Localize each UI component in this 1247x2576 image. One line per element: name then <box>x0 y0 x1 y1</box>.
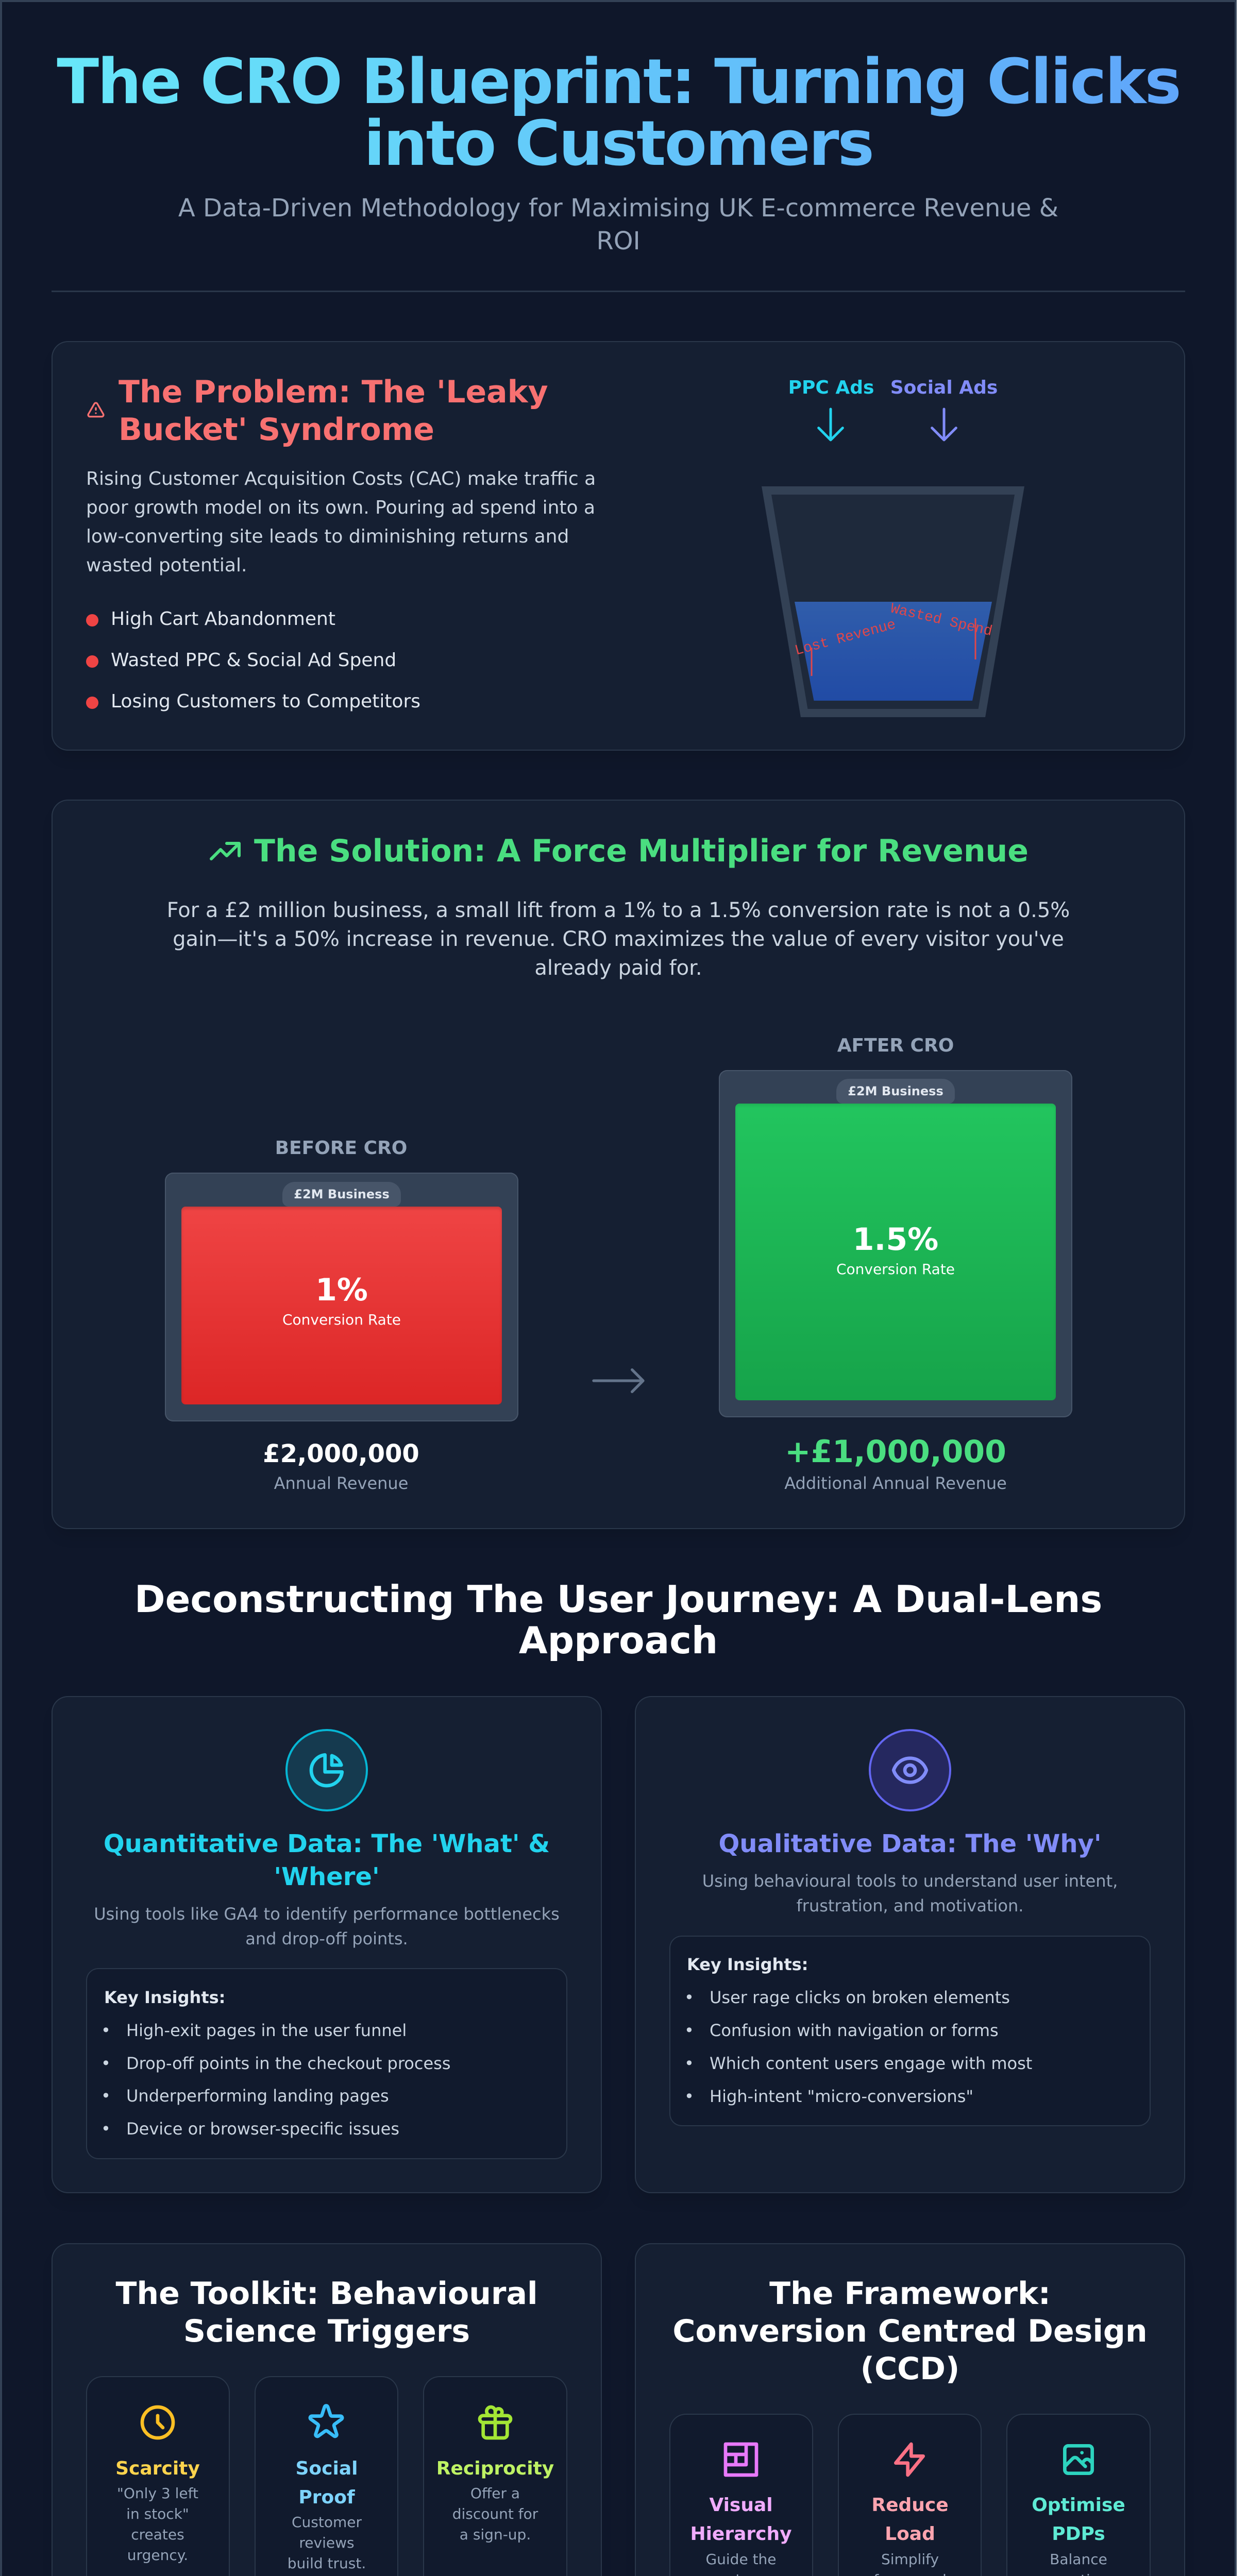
box: key insights qualitative: High-intent "micro-conversions" <box>710 2087 973 2106</box>
panel: the toolkit <box>52 2243 602 2576</box>
icon: lightning bolt <box>889 2439 930 2480</box>
box: key insights qualitative: • <box>684 2021 694 2040</box>
heading: scarcity: Scarcity <box>115 2458 200 2479</box>
heading: social proof: Proof <box>298 2487 355 2508</box>
card: reduce load <box>838 2414 982 2576</box>
arrow: social into bucket <box>931 408 957 441</box>
box: key insights qualitative: Which content users engage with most <box>710 2054 1032 2073</box>
heading: user journey: Deconstructing The User Journey: A Dual-Lens <box>134 1578 1102 1621</box>
solution description: gain—it's a 50% increase in revenue. CRO maximizes the value of every visitor you've <box>173 927 1064 951</box>
caption: annual revenue: Annual Revenue <box>274 1473 408 1493</box>
description: quantitative <box>94 1904 560 1948</box>
box: key insights qualitative <box>669 1936 1151 2126</box>
box: key insights: Drop-off points in the checkout process <box>126 2054 450 2073</box>
icon: clock <box>140 2405 175 2440</box>
box: key insights qualitative: User rage clicks on broken elements <box>710 1988 1010 2007</box>
text: visual hierarchy <box>701 2549 781 2576</box>
box: key insights qualitative: • <box>684 2054 694 2073</box>
solution description <box>167 899 1070 980</box>
heading: the problem: Bucket' Syndrome <box>119 412 434 448</box>
heading: social proof <box>296 2458 358 2508</box>
heading: social proof: Social <box>296 2458 358 2479</box>
chart: leaky bucket: Wasted Spend <box>889 601 993 640</box>
text: scarcity <box>117 2485 198 2564</box>
list: problem symptoms: Wasted PPC & Social Ad Spend <box>111 650 396 671</box>
title <box>52 52 1185 175</box>
problem description: wasted potential. <box>86 555 247 576</box>
heading: framework: The Framework: <box>769 2276 1051 2312</box>
box: key insights: High-exit pages in the user funnel <box>126 2021 407 2040</box>
heading: key insights qualitative: Key Insights: <box>687 1955 808 1974</box>
icon: photograph <box>1058 2439 1099 2480</box>
description: quantitative: Using tools like GA4 to identify performance bottlenecks <box>94 1904 560 1924</box>
box: key insights: • <box>101 2054 111 2073</box>
box: key insights qualitative: Confusion with navigation or forms <box>710 2021 999 2040</box>
icon: layout <box>720 2439 762 2480</box>
icon: warning triangle <box>87 402 105 417</box>
heading: the problem <box>119 374 548 448</box>
subtitle <box>178 194 1058 256</box>
heading: reduce load: Reduce <box>871 2495 949 2516</box>
label: PPC ads: PPC Ads <box>788 377 874 398</box>
icon: star <box>308 2404 344 2438</box>
card: visual hierarchy <box>669 2414 813 2576</box>
caption: additional annual revenue: Additional Annual Revenue <box>784 1473 1007 1493</box>
text: scarcity: creates <box>131 2526 184 2543</box>
card: optimise PDPs <box>1006 2414 1151 2576</box>
text: scarcity: in stock" <box>126 2505 189 2522</box>
description: quantitative: and drop-off points. <box>245 1929 408 1948</box>
heading: qualitative: Qualitative Data: The 'Why' <box>718 1829 1102 1858</box>
value: annual revenue before: £2,000,000 <box>263 1439 419 1468</box>
icon: pie chart <box>285 1729 368 1811</box>
text: social proof: build trust. <box>288 2555 366 2572</box>
heading: key insights: Key Insights: <box>104 1988 225 2007</box>
box: key insights qualitative: • <box>684 1988 694 2007</box>
panel: quantitative data <box>52 1696 602 2193</box>
text: reciprocity <box>452 2485 538 2543</box>
icon: gift <box>478 2405 512 2440</box>
text: social proof: Customer <box>292 2514 362 2531</box>
list: problem symptoms: High Cart Abandonment <box>111 608 335 630</box>
text: optimise PDPs: Balance <box>1050 2551 1107 2568</box>
text: optimise PDPs <box>1035 2549 1122 2576</box>
solution description: already paid for. <box>534 956 702 980</box>
heading: framework: (CCD) <box>861 2351 959 2387</box>
heading: visual hierarchy <box>690 2491 792 2549</box>
heading: user journey: Approach <box>519 1619 718 1662</box>
subtitle: ROI <box>596 227 641 256</box>
box: key insights: Underperforming landing pages <box>126 2086 389 2106</box>
chart: leaky bucket <box>762 486 1024 717</box>
chart: leaky bucket: Lost Revenue <box>793 617 898 659</box>
heading: reciprocity: Reciprocity <box>436 2458 554 2479</box>
heading: the solution: The Solution: A Force Multiplier for Revenue <box>254 833 1029 869</box>
badge: business size before: £2M Business <box>294 1187 390 1201</box>
card: scarcity <box>86 2376 230 2576</box>
bar: 1% conversion rate <box>181 1207 502 1404</box>
badge: business size after: £2M Business <box>848 1084 943 1098</box>
label: before CRO: BEFORE CRO <box>275 1138 407 1159</box>
heading: user journey <box>134 1578 1102 1662</box>
title: The CRO Blueprint: Turning Clicks <box>57 46 1180 118</box>
problem description: Rising Customer Acquisition Costs (CAC) make traffic a <box>86 468 596 489</box>
text: social proof <box>288 2514 366 2572</box>
text: reduce load <box>866 2549 954 2576</box>
label: after CRO: AFTER CRO <box>837 1035 954 1056</box>
text: social proof: reviews <box>299 2534 355 2551</box>
value: 1%: 1% <box>315 1272 368 1308</box>
text: scarcity: urgency. <box>127 2547 188 2564</box>
heading: toolkit: Science Triggers <box>183 2313 470 2349</box>
arrow: PPC into bucket <box>817 408 844 441</box>
caption: conversion rate after: Conversion Rate <box>836 1261 955 1278</box>
value: 1.5%: 1.5% <box>853 1222 938 1258</box>
bar: before CRO container <box>165 1173 518 1421</box>
heading: optimise PDPs: Optimise <box>1032 2495 1125 2516</box>
title: into Customers <box>364 108 873 180</box>
value: additional revenue: +£1,000,000 <box>785 1434 1006 1470</box>
box: key insights qualitative: • <box>684 2087 694 2106</box>
heading: quantitative: 'Where' <box>274 1862 380 1891</box>
heading: reduce load: Load <box>885 2523 935 2545</box>
box: key insights: • <box>101 2021 111 2040</box>
heading: optimise PDPs <box>1032 2491 1125 2549</box>
heading: optimise PDPs: PDPs <box>1052 2523 1105 2545</box>
text: reciprocity: Offer a <box>470 2485 520 2502</box>
description: qualitative <box>702 1871 1118 1916</box>
label: social ads: Social Ads <box>890 377 998 398</box>
box: key insights: • <box>101 2119 111 2139</box>
list: problem symptoms: Losing Customers to Competitors <box>111 691 420 712</box>
solution description: For a £2 million business, a small lift from a 1% to a 1.5% conversion rate is not a 0.5% <box>167 899 1070 922</box>
card: social proof <box>255 2376 398 2576</box>
card: reciprocity <box>423 2376 567 2576</box>
heading: framework: Conversion Centred Design <box>672 2313 1148 2349</box>
description: qualitative: Using behavioural tools to understand user intent, <box>702 1871 1118 1891</box>
heading: toolkit: The Toolkit: Behavioural <box>115 2276 538 2312</box>
text: reduce load: Simplify <box>881 2551 939 2568</box>
panel: qualitative data <box>635 1696 1185 2193</box>
text: reciprocity: a sign-up. <box>460 2526 531 2543</box>
list: insights <box>101 2021 450 2139</box>
description: qualitative: frustration, and motivation. <box>797 1896 1023 1916</box>
heading: toolkit <box>115 2276 538 2349</box>
icon: eye <box>869 1729 951 1811</box>
panel: the problem <box>52 341 1185 751</box>
heading: quantitative <box>104 1829 550 1891</box>
icon: trending up <box>210 842 241 860</box>
heading: reduce load <box>871 2491 949 2549</box>
arrow: before to after <box>592 1368 645 1393</box>
heading: the problem: The Problem: The 'Leaky <box>119 374 548 410</box>
heading: framework <box>672 2275 1148 2388</box>
box: key insights <box>86 1968 567 2159</box>
bar: after CRO container <box>719 1070 1072 1417</box>
problem description <box>86 468 596 576</box>
panel: the solution <box>52 800 1185 1529</box>
badge: business size after <box>836 1079 955 1104</box>
panel: the framework <box>635 2243 1185 2576</box>
subtitle: A Data-Driven Methodology for Maximising UK E-commerce Revenue & <box>178 194 1058 223</box>
list: insights qualitative <box>684 1988 1032 2106</box>
bar: 1.5% conversion rate <box>735 1104 1056 1400</box>
heading: visual hierarchy: Visual <box>709 2495 773 2516</box>
text: visual hierarchy: Guide the <box>705 2551 777 2568</box>
box: key insights: • <box>101 2086 111 2106</box>
box: key insights: Device or browser-specific issues <box>126 2119 399 2139</box>
caption: conversion rate: Conversion Rate <box>282 1311 401 1328</box>
heading: visual hierarchy: Hierarchy <box>690 2523 792 2545</box>
text: reciprocity: discount for <box>452 2505 538 2522</box>
problem description: poor growth model on its own. Pouring ad spend into a <box>86 497 595 518</box>
badge: business size before <box>282 1182 401 1207</box>
heading: quantitative: Quantitative Data: The 'What' & <box>104 1829 550 1858</box>
problem description: low-converting site leads to diminishing returns and <box>86 526 569 547</box>
text: scarcity: "Only 3 left <box>117 2485 198 2502</box>
list: problem symptoms <box>86 608 420 712</box>
